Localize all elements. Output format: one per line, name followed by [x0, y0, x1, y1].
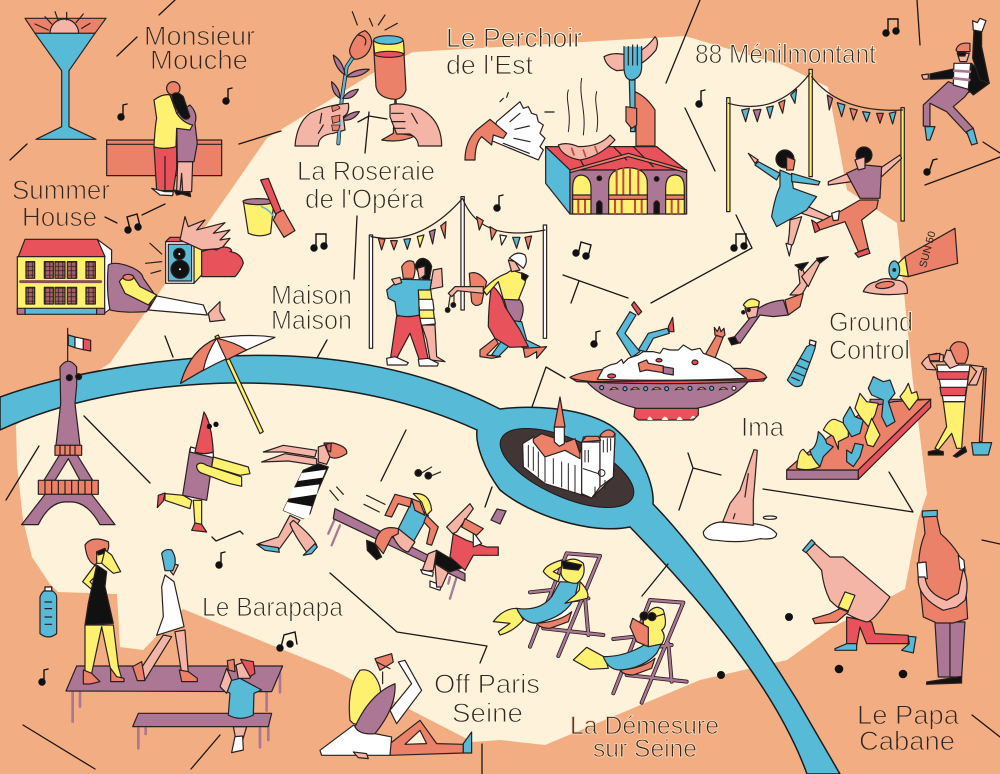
figure: runner in striped dress: [257, 443, 347, 555]
bowling balls: [717, 613, 907, 679]
figure: reading mermaid: [573, 600, 687, 703]
icon: bottle left: [40, 587, 57, 637]
building: Summer House: [17, 239, 112, 314]
icon: bucket and spade: [243, 178, 295, 237]
icon: beach umbrella: [181, 335, 275, 434]
text: Maison Maison: Maison: [271, 305, 352, 335]
text: Le Perchoir de l'Est: Le Perchoir: [446, 23, 582, 53]
icon: spilled sunscreen tube: [863, 228, 958, 295]
text: Ground Control: Ground: [829, 307, 913, 337]
icon: spiky plant and bush: [180, 217, 243, 277]
figure: tango dancers: [445, 253, 547, 358]
text: La Démesure sur Seine: sur Seine: [593, 735, 697, 763]
text: Off Paris Seine: Seine: [452, 698, 523, 728]
river Seine with ring around the island: [0, 355, 840, 774]
text: La Roseraie de l'Opéra: La Roseraie: [297, 156, 435, 186]
text: La Roseraie de l'Opéra: [297, 156, 435, 214]
bench with seated person: [133, 659, 272, 753]
figure: swing dancing couple: [748, 147, 902, 257]
text: La Roseraie de l'Opéra: de l'Opéra: [305, 184, 425, 214]
text: Monsieur Mouche: [144, 21, 255, 75]
text: Le Papa Cabane: Le Papa: [857, 700, 960, 730]
figure: diver: [728, 257, 828, 345]
figure: sunbather eating burger: [107, 263, 225, 322]
picnic table: [66, 666, 283, 722]
Eiffel Tower with flag: [22, 328, 115, 525]
figure: sunbathing mermaid: [493, 553, 603, 656]
figure: gardener with shovel: [922, 342, 992, 457]
bunting: dance floor left: [369, 197, 547, 348]
icon: melting obelisk: [703, 450, 777, 542]
text: Off Paris Seine: [434, 669, 540, 728]
text: Maison Maison: Maison: [271, 280, 352, 310]
text: Off Paris Seine: Off Paris: [434, 669, 540, 699]
text: Le Papa Cabane: Cabane: [859, 726, 955, 756]
text: Ima: Ima: [741, 412, 785, 442]
figure: dancing man top right: [922, 18, 989, 145]
icon: water bottle near Ground Control: [787, 340, 816, 387]
figure: model in white dress: [133, 550, 197, 682]
text: Ground Control: [829, 307, 913, 365]
text: Ground Control: Control: [829, 335, 910, 365]
building: market hall with sausage: [546, 78, 687, 214]
figure: model in black dress: [83, 539, 124, 684]
figure: standing bottle character: [917, 510, 968, 684]
figure: hand with rosé glass: [352, 12, 442, 146]
text: Le Barapapa: Le Barapapa: [202, 592, 344, 622]
text: Maison Maison: [271, 280, 352, 335]
bunting: dance floor right: [727, 69, 904, 221]
text: La Démesure sur Seine: [570, 712, 719, 763]
figure: people on tipping bench: [328, 487, 498, 599]
text: Summer House: [12, 175, 110, 232]
garden bed with plants: [787, 377, 931, 479]
Notre-Dame on the island: [523, 397, 615, 498]
text: Monsieur Mouche: Monsieur: [144, 21, 255, 51]
icon: speaker with sound lines: [146, 237, 202, 283]
text: Summer House: House: [22, 202, 97, 232]
island: [489, 412, 645, 524]
figure: bottle character bowling: [803, 540, 916, 653]
text: 88 Ménilmontant: 88 Ménilmontant: [695, 39, 876, 69]
text: Le Perchoir de l'Est: [446, 23, 582, 80]
text: Le Papa Cabane: [857, 700, 960, 756]
icon: spilled sunscreen tube: SUN 50: [917, 230, 939, 269]
figure: embracing couple on wall: [107, 82, 222, 197]
figure: legs in giant paella dish: [570, 302, 767, 420]
figure: hand with sausage on fork: [604, 37, 657, 146]
text: Summer House: Summer: [12, 175, 110, 205]
icon: flying cup: [491, 509, 506, 524]
icon: flying sunglasses: [415, 467, 441, 479]
figure: embracing dancers: [387, 258, 445, 366]
icon: cocktail glass with sunset: [25, 12, 106, 139]
text: Le Perchoir de l'Est: de l'Est: [446, 50, 533, 80]
text: La Démesure sur Seine: La Démesure: [570, 712, 719, 740]
figure: reclining drinker with hair: [320, 654, 472, 759]
text: Monsieur Mouche: Mouche: [150, 45, 248, 75]
figure: lipstick character: [157, 412, 250, 532]
music notes: [39, 19, 937, 685]
figure: hand with paper fan: [465, 93, 545, 160]
figure: hand with rose: [295, 31, 372, 146]
